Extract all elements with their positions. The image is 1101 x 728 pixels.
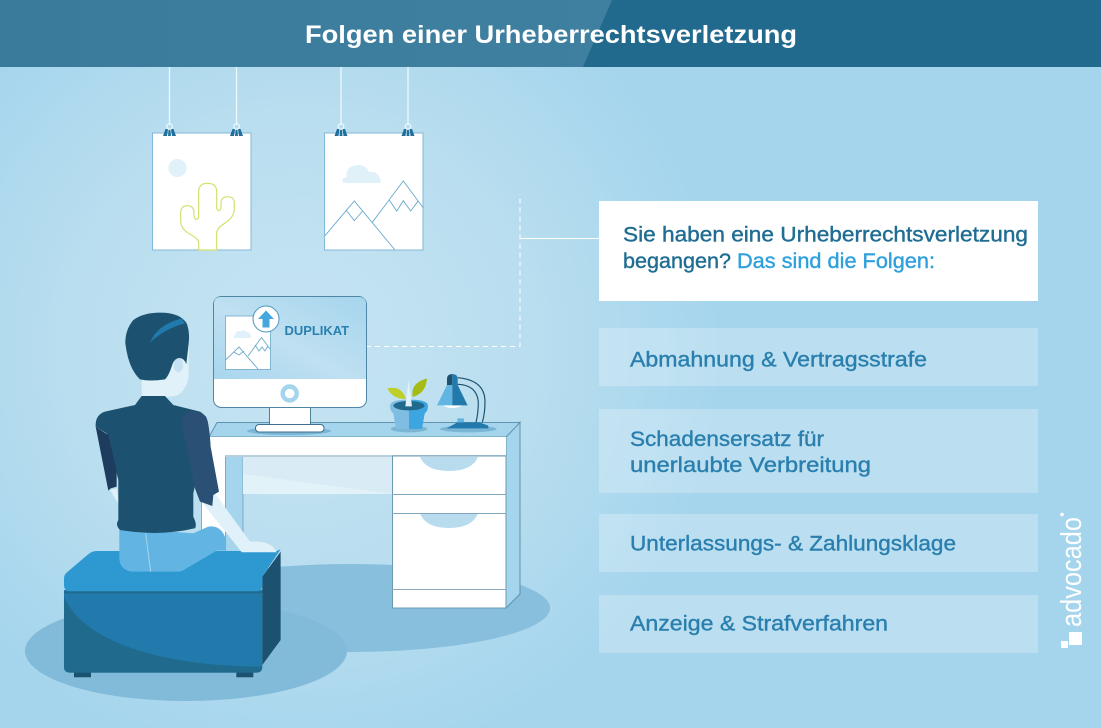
panel: Abmahnung: Abmahnung & Vertragsstrafe	[630, 348, 927, 372]
panel: Schadensersatz	[599, 409, 1038, 493]
floor shadow: desk	[150, 564, 550, 652]
legs	[119, 526, 225, 572]
poster: cactus	[152, 67, 251, 250]
panel: Unterlassung: Unterlassungs- & Zahlungsklage	[630, 532, 956, 556]
header banner	[0, 0, 1101, 67]
icon: upload arrow	[253, 306, 279, 332]
image thumbnail	[226, 316, 270, 370]
sleeve: left	[96, 427, 117, 491]
duplikat label: DUPLIKAT	[284, 323, 349, 338]
panel: Schadensersatz: unerlaubte Verbreitung	[630, 453, 871, 477]
panel: intro: begangen?	[623, 249, 731, 273]
person	[96, 313, 277, 572]
panel: Anzeige: Anzeige & Strafverfahren	[630, 612, 888, 636]
bench	[64, 549, 281, 677]
panel: intro	[599, 201, 1038, 301]
poster: mountains	[324, 67, 423, 250]
dashed connector	[366, 194, 600, 346]
head and neck	[125, 313, 189, 397]
panel: Anzeige	[599, 595, 1038, 653]
torso	[96, 396, 208, 533]
panel: Schadensersatz: Schadensersatz für	[630, 427, 824, 451]
panel: Abmahnung	[599, 328, 1038, 386]
monitor	[214, 296, 366, 435]
panel: intro: Sie haben eine Urheberrechtsverletzung	[623, 222, 1028, 246]
logo: advocado: advocado	[1056, 517, 1088, 627]
desk	[202, 422, 520, 608]
floor shadow: bench	[25, 601, 347, 701]
desk lamp	[437, 374, 497, 432]
panel: Unterlassung	[599, 514, 1038, 572]
title: Folgen einer Urheberrechtsverletzung	[305, 21, 797, 49]
sleeve: right	[182, 411, 219, 506]
arms	[110, 488, 277, 552]
plant	[387, 378, 428, 432]
panel: intro: Das sind die Folgen:	[737, 249, 935, 273]
